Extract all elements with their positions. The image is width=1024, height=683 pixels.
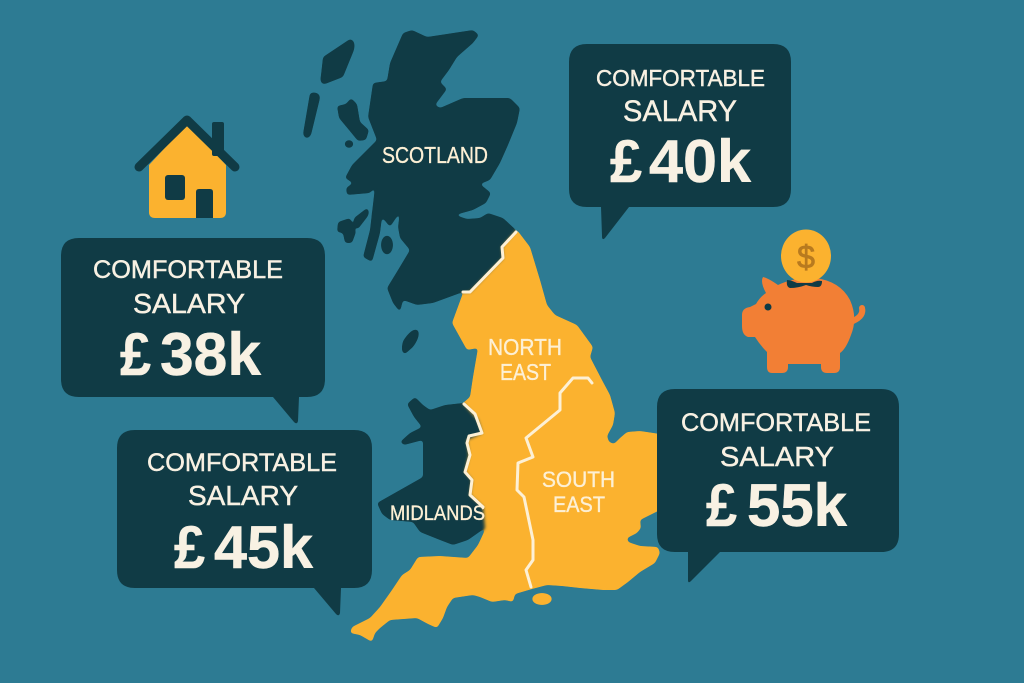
region: Wales and Midlands [377, 397, 485, 545]
map land shapes [303, 30, 660, 642]
Isle of Wight [532, 593, 552, 605]
islands: Scottish isles [303, 39, 419, 354]
callout: £38k: COMFORTABLE [93, 256, 283, 284]
pig tail [853, 308, 862, 321]
coin [781, 230, 831, 282]
region: England [350, 230, 660, 642]
icon: house [139, 120, 235, 218]
coin slot [787, 280, 822, 288]
pig eye [764, 304, 772, 310]
label: South East [542, 467, 615, 517]
label: North East: EAST [500, 359, 551, 385]
callout: £55k: £ [706, 472, 737, 539]
label: Scotland: SCOTLAND [382, 142, 488, 168]
callout: £55k [657, 389, 899, 582]
callout: £55k: SALARY [720, 441, 834, 472]
callout: £40k [569, 44, 791, 239]
callout: £45k: COMFORTABLE [147, 449, 337, 477]
region: Scotland [345, 30, 520, 312]
dollar sign: $ [797, 239, 815, 275]
callout: £40k: SALARY [623, 95, 737, 128]
callout: £45k: £ [174, 514, 205, 581]
icon: piggy bank [742, 230, 862, 373]
label: South East: EAST [553, 492, 605, 517]
callout: £55k: COMFORTABLE [681, 409, 871, 437]
label: North East: NORTH [488, 334, 562, 360]
label: Midlands: MIDLANDS [390, 502, 485, 525]
callout: £40k: 40k [649, 128, 752, 195]
callout: £40k: £ [610, 128, 642, 195]
label: South East: SOUTH [542, 467, 615, 492]
callout: £45k: SALARY [188, 480, 298, 511]
callout: £38k: 38k [160, 321, 262, 388]
pig body [742, 277, 854, 373]
map of the UK [303, 30, 660, 642]
callout: £38k: SALARY [133, 288, 245, 319]
callout: £45k: 45k [214, 514, 314, 581]
callout: £38k: £ [120, 321, 151, 388]
callout: £38k [61, 238, 325, 423]
callout: £55k: 55k [747, 472, 848, 539]
label: North East [488, 334, 562, 385]
region borders [463, 232, 592, 587]
callout: £45k [117, 430, 372, 615]
callout: £40k: COMFORTABLE [596, 65, 765, 91]
